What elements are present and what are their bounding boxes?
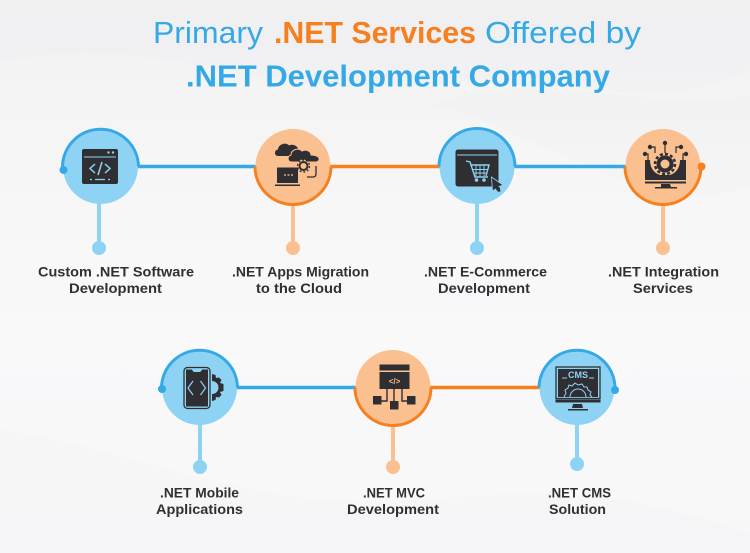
label bbox=[608, 264, 719, 296]
service: .NET E-Commerce Development bbox=[424, 128, 547, 296]
label: .NET E-Commerce bbox=[424, 264, 547, 280]
label: Custom .NET Software bbox=[38, 264, 194, 280]
service: .NET Integration Services bbox=[608, 129, 719, 296]
title: Primary bbox=[153, 15, 264, 50]
service: Custom .NET Software Development bbox=[38, 129, 194, 296]
service: .NET Apps Migration to the Cloud bbox=[232, 129, 369, 296]
label: Development bbox=[347, 501, 439, 517]
label: Services bbox=[633, 280, 693, 296]
service: .NET MVC Development bbox=[347, 350, 439, 517]
service: .NET Mobile Applications bbox=[156, 350, 243, 517]
label: .NET Apps Migration bbox=[232, 264, 369, 280]
icon: gear monitor bbox=[643, 141, 688, 188]
label: .NET Integration bbox=[608, 264, 719, 280]
connectors row 2 bbox=[236, 386, 540, 389]
icon: mobile and gear bbox=[184, 368, 224, 408]
connectors row 1 bbox=[138, 165, 626, 168]
title: .NET Services bbox=[274, 15, 476, 50]
label: Solution bbox=[549, 501, 606, 517]
icon: CMS monitor bbox=[556, 367, 600, 410]
icon: MVC diagram bbox=[373, 364, 416, 410]
label bbox=[347, 484, 439, 517]
icon: shopping cart window bbox=[456, 150, 503, 192]
icon: code window bbox=[82, 149, 118, 184]
title: Offered by bbox=[485, 15, 642, 50]
label bbox=[424, 264, 547, 296]
label bbox=[548, 484, 611, 517]
label: .NET MVC bbox=[363, 484, 425, 500]
label: .NET Mobile bbox=[160, 484, 239, 500]
label: Development bbox=[438, 280, 530, 296]
icon: CMS monitor: CMS bbox=[568, 370, 588, 380]
label bbox=[38, 264, 194, 296]
title: .NET Development Company bbox=[186, 58, 611, 94]
label: Applications bbox=[156, 501, 243, 517]
title bbox=[153, 15, 642, 94]
icon: MVC diagram: </> bbox=[389, 377, 401, 386]
icon: cloud migration bbox=[275, 144, 319, 186]
label bbox=[156, 484, 243, 517]
service: .NET CMS Solution bbox=[539, 350, 619, 517]
label: to the Cloud bbox=[256, 280, 342, 296]
label bbox=[232, 264, 369, 296]
label: Development bbox=[69, 280, 162, 296]
label: .NET CMS bbox=[548, 484, 611, 500]
